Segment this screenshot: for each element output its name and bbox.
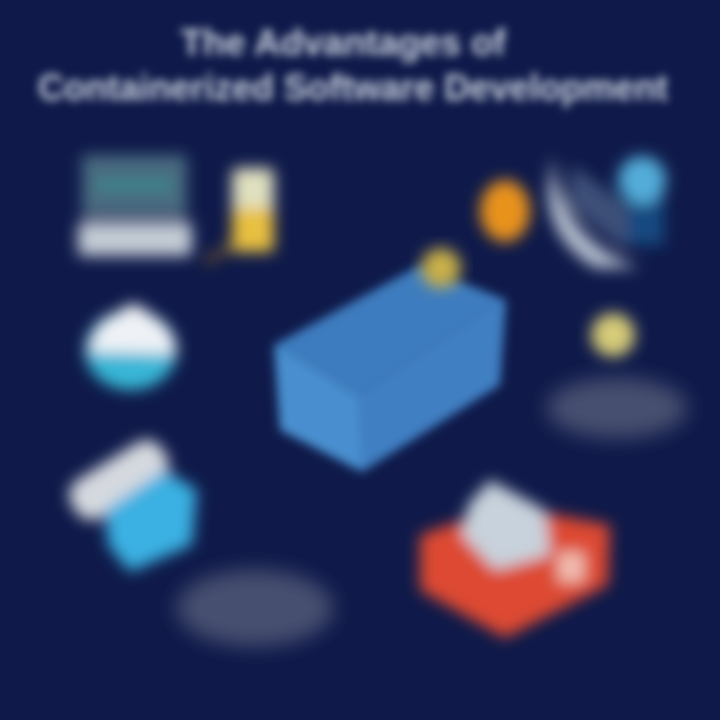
icon: white tag and blue box [62,433,197,572]
central blue container [274,265,506,472]
title [38,22,668,108]
icon: yellow bulb [591,313,635,357]
icon: cloud [85,304,177,390]
icon: red box [420,480,610,638]
title: The Advantages of [180,22,506,63]
icon: dark cloud [177,570,333,646]
icon: battery [205,168,274,262]
icon: dark platform [547,378,687,438]
container top face [274,265,506,398]
title: Containerized Software Development [38,67,668,108]
icon: laptop [78,155,192,256]
icon: satellite dish [548,155,666,268]
icon: orange coin [480,180,530,242]
container front face [274,345,362,472]
icon: yellow coin on container [421,248,461,288]
container side face [358,300,506,472]
